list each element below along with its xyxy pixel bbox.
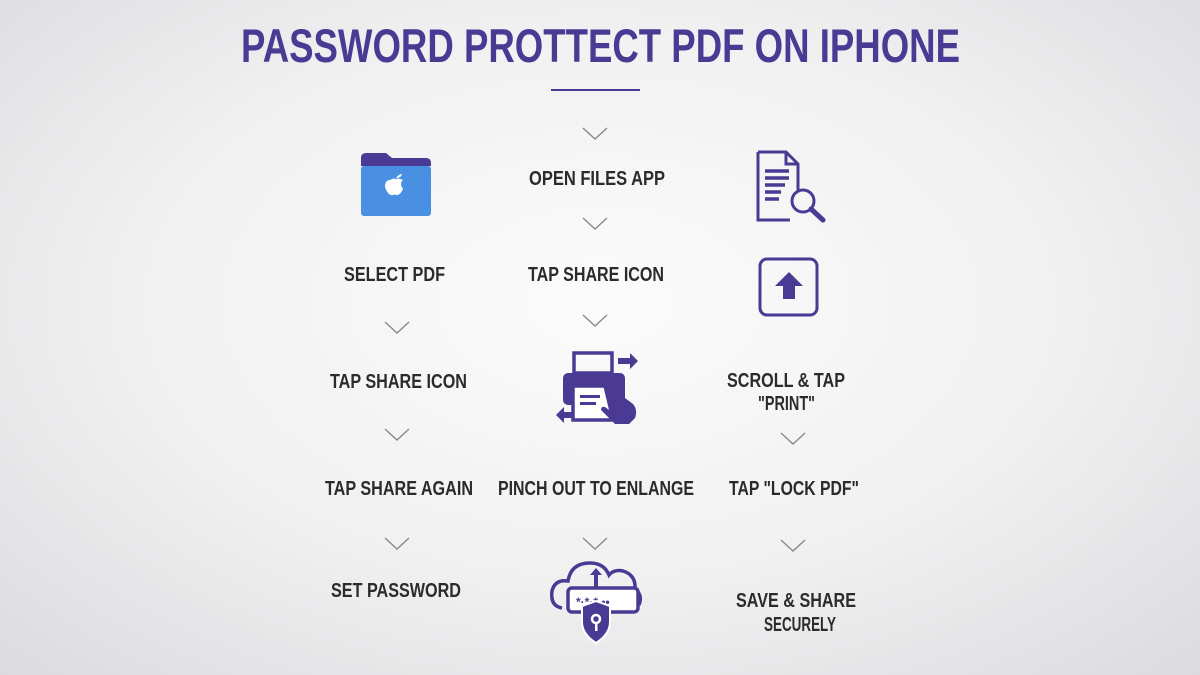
step: tap share icon center: TAP SHARE ICON xyxy=(528,264,664,286)
step: save & share securely xyxy=(736,590,856,636)
arrow: chevron 1 xyxy=(583,128,607,139)
icon: apple folder xyxy=(361,153,431,216)
arrow: chevron center 4 xyxy=(583,538,607,549)
arrow: chevron right 1 xyxy=(781,433,805,444)
title: PASSWORD PROTTECT PDF ON IPHONE xyxy=(241,19,960,72)
step: tap share again: TAP SHARE AGAIN xyxy=(325,478,473,500)
arrow: chevron 3 xyxy=(583,315,607,326)
icon: cloud lock: *·*·* •• xyxy=(576,595,610,609)
step: pinch out: PINCH OUT TO ENLANGE xyxy=(498,478,694,500)
step: save & share securely: SAVE & SHARE xyxy=(736,590,856,612)
icon: cloud lock xyxy=(552,563,640,643)
icon: document search xyxy=(758,152,823,220)
step: set password: SET PASSWORD xyxy=(331,580,461,602)
icon: share square xyxy=(760,259,817,315)
arrow: chevron right 2 xyxy=(781,540,805,551)
step: scroll & tap print: SCROLL & TAP xyxy=(727,370,845,392)
arrow: chevron 2 xyxy=(583,218,607,229)
step: save & share securely: SECURELY xyxy=(764,614,836,636)
arrow: chevron left 1 xyxy=(385,322,409,333)
step: scroll & tap print xyxy=(727,370,845,415)
step: scroll & tap print: "PRINT" xyxy=(758,393,815,415)
arrow: chevron left 3 xyxy=(385,538,409,549)
divider xyxy=(551,89,640,91)
step: tap share icon left: TAP SHARE ICON xyxy=(330,371,467,393)
arrow: chevron left 2 xyxy=(385,429,409,440)
step: tap lock pdf: TAP "LOCK PDF" xyxy=(729,478,859,500)
step: select pdf: SELECT PDF xyxy=(344,264,445,286)
step: open files app: OPEN FILES APP xyxy=(529,168,665,190)
icon: printer with hand xyxy=(556,353,638,424)
